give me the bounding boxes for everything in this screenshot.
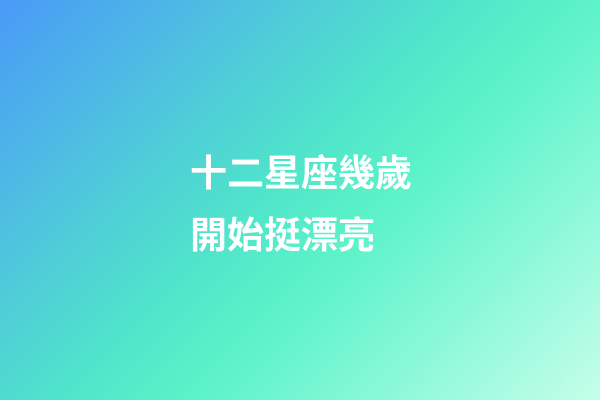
title line 2: 開始挺漂亮 <box>190 215 375 256</box>
title <box>190 153 412 256</box>
title line 1: 十二星座幾歲 <box>190 153 412 194</box>
